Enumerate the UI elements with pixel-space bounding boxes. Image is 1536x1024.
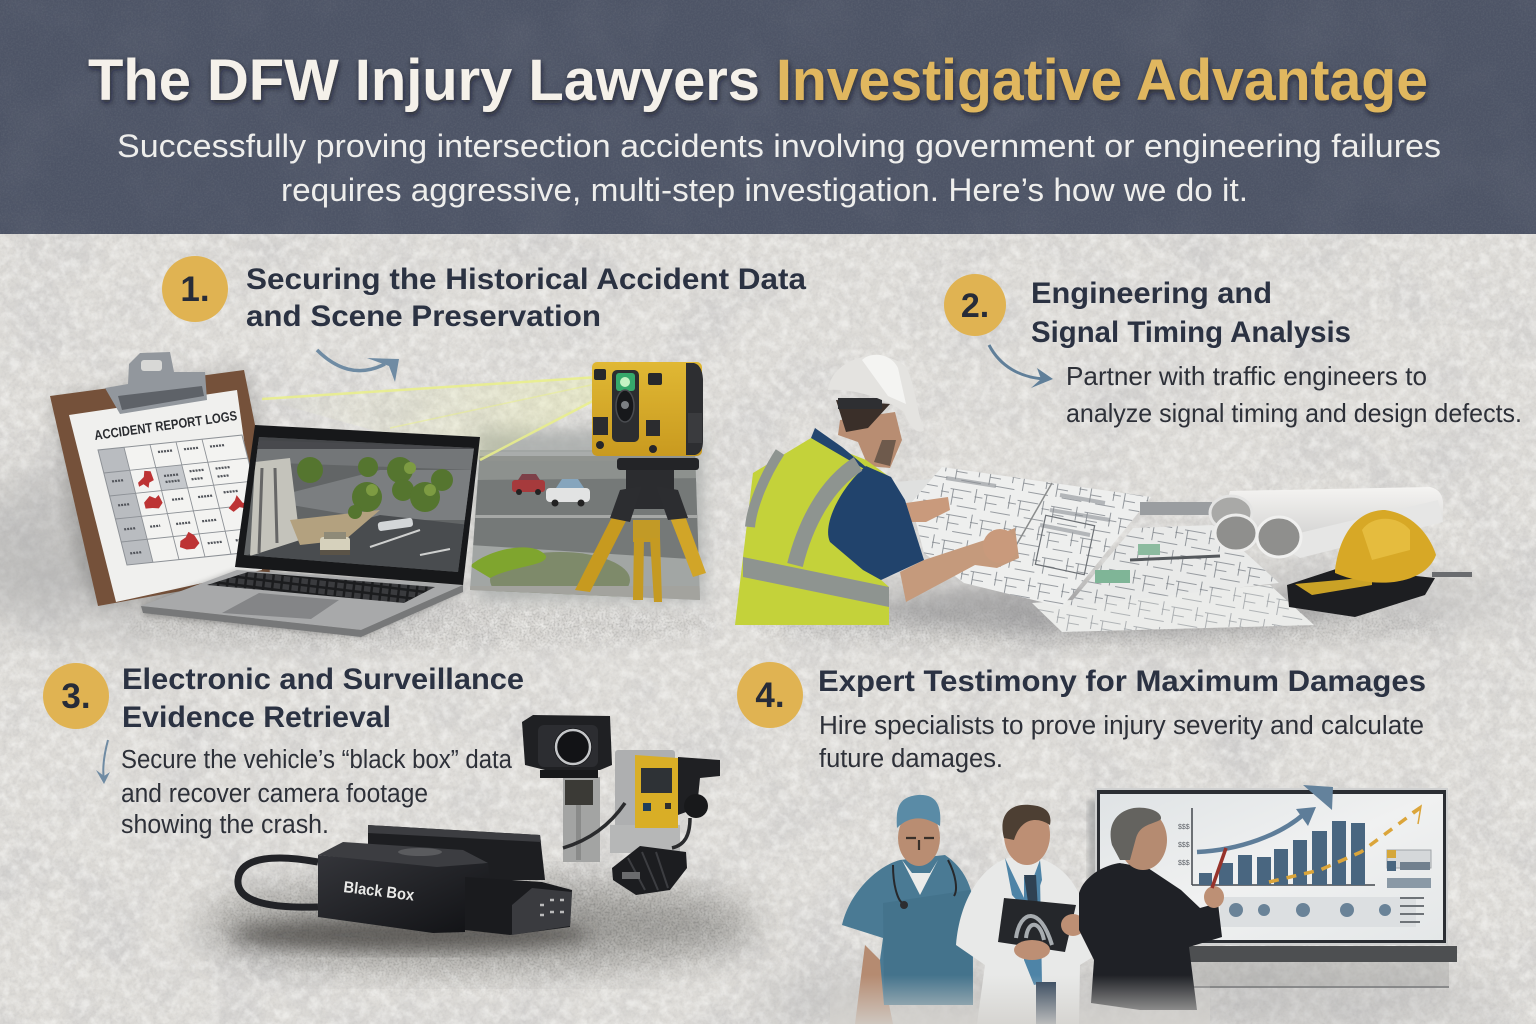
number badge 3 xyxy=(43,663,109,729)
gold trend line xyxy=(1269,806,1421,882)
heading 4: Expert Testimony for Maximum Damages xyxy=(818,665,1426,698)
log table xyxy=(98,435,271,565)
body 3: Secure the vehicle’s “black box” data xyxy=(121,746,513,774)
body 4: Hire specialists to prove injury severity and calculate xyxy=(819,712,1424,740)
sheet: lower xyxy=(1032,585,1314,632)
number badge 4: 4. xyxy=(755,676,785,715)
body 2: Partner with traffic engineers to xyxy=(1066,361,1427,391)
reflective stripes xyxy=(750,452,780,527)
report title: ACCIDENT REPORT LOGS xyxy=(93,408,238,443)
surveillance camera on pole xyxy=(522,715,612,862)
shirt xyxy=(828,466,924,580)
arrow 1 xyxy=(317,350,399,382)
yellow recorder unit xyxy=(610,750,720,853)
box label: Black Box xyxy=(343,879,415,905)
box front xyxy=(318,855,490,933)
yellow hard hat and device xyxy=(1287,510,1472,617)
vest xyxy=(735,438,891,625)
forearm and hands xyxy=(900,528,1019,602)
footage cars xyxy=(320,518,413,555)
x-ray film xyxy=(998,898,1076,952)
heading 3 xyxy=(122,663,524,734)
heading 2 xyxy=(1031,277,1351,349)
car: white xyxy=(546,479,590,506)
title: Investigative Advantage xyxy=(776,48,1428,113)
rear box xyxy=(368,825,545,880)
bars xyxy=(1199,821,1365,885)
page background xyxy=(0,234,1536,1024)
clipboard with accident report logs xyxy=(50,352,271,606)
3d laser scanner on tripod xyxy=(575,362,706,602)
chart labels: $$$ xyxy=(1178,824,1190,831)
title: The DFW Injury Lawyers xyxy=(88,48,760,113)
number badge 2: 2. xyxy=(961,287,989,325)
body 2: analyze signal timing and design defects. xyxy=(1066,398,1522,428)
section 2: engineering and signal timing xyxy=(735,274,1522,635)
subtitle xyxy=(117,128,1441,208)
heading 3: Electronic and Surveillance xyxy=(122,663,524,696)
car: red xyxy=(512,474,545,495)
side table xyxy=(1387,850,1431,888)
heading 2: Signal Timing Analysis xyxy=(1031,316,1351,349)
collar xyxy=(811,428,872,472)
body 4: future damages. xyxy=(819,745,1003,773)
chart labels: $$$ xyxy=(1178,842,1190,849)
header banner xyxy=(0,0,1536,234)
heading 2: Engineering and xyxy=(1031,277,1272,310)
section 4: expert testimony xyxy=(737,662,1457,1024)
heading 3: Evidence Retrieval xyxy=(122,701,391,734)
sheet: middle xyxy=(1067,525,1279,607)
chart labels xyxy=(1178,824,1190,867)
device xyxy=(1287,568,1435,617)
cable xyxy=(563,803,690,848)
presentation board with chart xyxy=(1088,785,1457,988)
body 2 xyxy=(1066,361,1522,428)
box top xyxy=(318,842,488,869)
engineer in safety vest xyxy=(735,355,1019,625)
section 1: historical accident data xyxy=(50,256,806,637)
arrow 2 xyxy=(989,345,1053,388)
section 3: electronic and surveillance evidence xyxy=(43,663,720,951)
number badge 1 xyxy=(162,256,228,322)
doctor in white coat with x-ray xyxy=(956,805,1096,1024)
number badge 3: 3. xyxy=(61,677,91,716)
blue trend arrow xyxy=(1197,807,1316,852)
number badge 1: 1. xyxy=(180,270,210,309)
fade at bottom of figures xyxy=(830,975,1210,1024)
heading 1 xyxy=(246,263,806,333)
body 3: and recover camera footage xyxy=(121,780,428,808)
tripod xyxy=(575,458,706,602)
body 3: showing the crash. xyxy=(121,811,329,839)
sheet: open plan xyxy=(911,467,1151,607)
neck and face xyxy=(838,412,902,468)
presenter in dark suit xyxy=(1079,808,1226,1010)
hat xyxy=(1335,510,1436,583)
blueprint sheets xyxy=(880,467,1340,635)
arrow 3 xyxy=(96,740,110,784)
black box device xyxy=(230,825,590,951)
clip xyxy=(105,352,207,414)
rolled plans xyxy=(1140,487,1443,558)
subtitle: Successfully proving intersection accidents involving government or engineering failures xyxy=(117,128,1441,164)
chart labels: $$$ xyxy=(1178,860,1190,867)
body 4 xyxy=(819,712,1424,773)
number badge 2 xyxy=(944,274,1006,336)
heading 1: Securing the Historical Accident Data xyxy=(246,263,806,296)
scene backdrop xyxy=(470,450,705,608)
body 3 xyxy=(121,746,513,839)
title xyxy=(88,48,1428,113)
heading 1: and Scene Preservation xyxy=(246,300,601,333)
surgeon in scrubs xyxy=(842,795,973,1024)
laser beams xyxy=(262,376,614,460)
subtitle: requires aggressive, multi-step investigation. Here’s how we do it. xyxy=(281,172,1248,208)
connector block xyxy=(465,877,572,935)
sheet: back left xyxy=(896,478,942,520)
scanner head xyxy=(592,362,702,456)
ledge xyxy=(1187,946,1457,962)
small connector xyxy=(612,846,687,895)
number badge 4 xyxy=(737,662,803,728)
cable loop xyxy=(238,858,318,907)
mist behind scene xyxy=(478,430,703,600)
pointer flag xyxy=(1303,785,1333,810)
lower strip of icons xyxy=(1220,897,1424,927)
laptop showing intersection footage xyxy=(141,425,480,637)
helmet xyxy=(828,356,924,432)
